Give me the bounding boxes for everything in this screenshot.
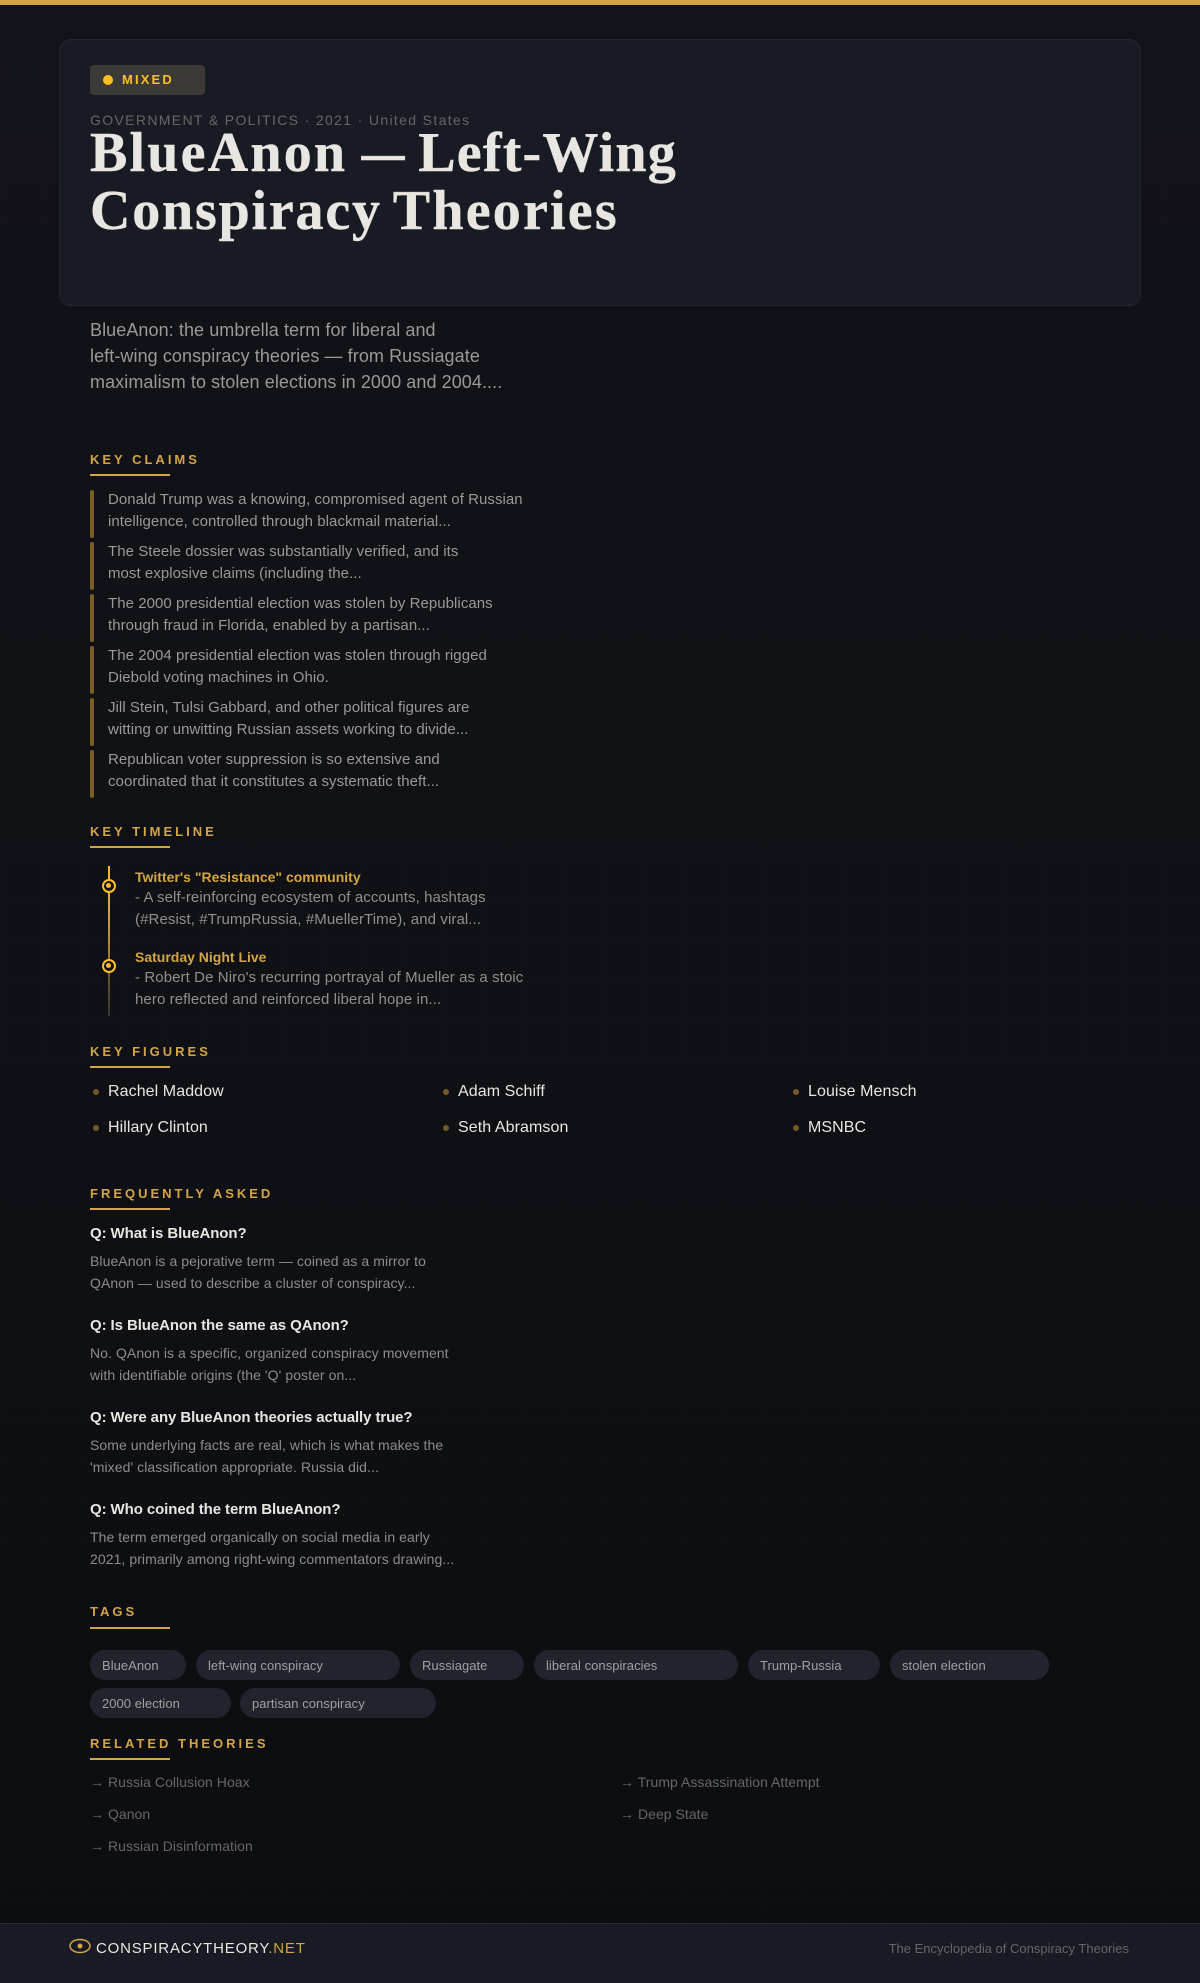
figure: Rachel Maddow: Rachel Maddow [108,1083,224,1100]
faq 3: Q: Were any BlueAnon theories actually true? [90,1409,413,1426]
claim 6: coordinated that it constitutes a systematic theft... [108,773,439,790]
intro text: left-wing conspiracy theories — from Russiagate [90,346,480,366]
heading: key timeline: KEY TIMELINE [90,824,217,839]
faq 2: with identifiable origins (the 'Q' poster on... [90,1367,356,1383]
tag: 2000 election [102,1696,180,1711]
timeline event 2: - Robert De Niro's recurring portrayal of Mueller as a stoic [135,969,523,986]
faq 4 [90,1501,454,1567]
heading: key claims: KEY CLAIMS [90,452,200,467]
panel: key timeline [90,824,523,1016]
heading: related theories: RELATED THEORIES [90,1736,268,1751]
tag [90,1650,186,1680]
timeline event 2: Saturday Night Live [135,949,266,965]
wordmark: CONSPIRACYTHEORY.NET [96,1940,306,1957]
claim 5: Jill Stein, Tulsi Gabbard, and other political figures are [108,699,469,716]
figure: Seth Abramson: Seth Abramson [458,1119,568,1136]
title [90,122,677,242]
title: — [361,122,404,184]
panel: key figures [90,1044,917,1136]
claim 1 [90,490,523,538]
timeline node 2 [102,959,116,973]
faq 4: The term emerged organically on social media in early [90,1529,430,1545]
tag: stolen election [902,1658,986,1673]
timeline node 1 [102,879,116,893]
tag [534,1650,738,1680]
intro text [90,320,502,392]
faq 1: Q: What is BlueAnon? [90,1225,247,1242]
timeline event 1: (#Resist, #TrumpRussia, #MuellerTime), and viral... [135,911,481,928]
related link: → Deep State [620,1806,708,1822]
claim 3: The 2000 presidential election was stolen by Republicans [108,595,493,612]
tag: left-wing conspiracy [208,1658,323,1673]
tag: liberal conspiracies [546,1658,657,1673]
icon: status dot [103,75,113,85]
claim 1: Donald Trump was a knowing, compromised agent of Russian [108,491,523,508]
heading: tags: TAGS [90,1604,137,1619]
faq 1: QAnon — used to describe a cluster of conspiracy... [90,1275,415,1291]
tag [748,1650,880,1680]
claim 4: The 2004 presidential election was stolen through rigged [108,647,487,664]
claim 1: intelligence, controlled through blackmail material... [108,513,451,530]
panel: key claims [90,452,523,798]
claim 3: through fraud in Florida, enabled by a partisan... [108,617,430,634]
heading: frequently asked: FREQUENTLY ASKED [90,1186,273,1201]
category and date line: GOVERNMENT & POLITICS · 2021 · United States [90,112,470,128]
tag [90,1688,231,1718]
claim 3 [90,594,493,642]
claim 6: Republican voter suppression is so extensive and [108,751,440,768]
heading: key figures: KEY FIGURES [90,1044,211,1059]
faq 3: 'mixed' classification appropriate. Russia did... [90,1459,379,1475]
claim 4: Diebold voting machines in Ohio. [108,669,329,686]
panel: tags [90,1604,1049,1718]
tag: BlueAnon [102,1658,159,1673]
related link: → Russia Collusion Hoax [90,1774,250,1790]
tag [240,1688,436,1718]
faq 1 [90,1225,426,1291]
related link: → Qanon [90,1806,150,1822]
faq 4: 2021, primarily among right-wing commentators drawing... [90,1551,454,1567]
panel: frequently asked [90,1186,454,1567]
timeline line [108,866,110,1016]
faq 1: BlueAnon is a pejorative term — coined as a mirror to [90,1253,426,1269]
title: BlueAnon Left-Wing [90,122,677,184]
timeline event 2: hero reflected and reinforced liberal hope in... [135,991,441,1008]
tag [410,1650,524,1680]
faq 4: Q: Who coined the term BlueAnon? [90,1501,340,1518]
faq 3 [90,1409,443,1475]
related link: → Trump Assassination Attempt [620,1774,820,1790]
timeline event 2 [135,949,523,1008]
tagline: The Encyclopedia of Conspiracy Theories [889,1941,1129,1956]
figure: Adam Schiff: Adam Schiff [458,1083,545,1100]
top accent bar [0,0,1200,5]
intro text: BlueAnon: the umbrella term for liberal and [90,320,436,340]
claim 4 [90,646,487,694]
claim 6 [90,750,440,798]
timeline event 1: - A self-reinforcing ecosystem of accounts, hashtags [135,889,486,906]
tag [890,1650,1049,1680]
faq 2 [90,1317,449,1383]
tag: Trump-Russia [760,1658,842,1673]
figure: Hillary Clinton: Hillary Clinton [108,1119,208,1136]
footer [0,1923,1200,1983]
timeline event 1: Twitter's "Resistance" community [135,869,361,885]
icon: eye logo [69,1938,91,1954]
timeline event 1 [135,869,486,928]
claim 5 [90,698,469,746]
title: Conspiracy Theories [90,180,619,242]
claim 2: most explosive claims (including the... [108,565,362,582]
badge: mixed verdict [90,65,205,95]
intro text: maximalism to stolen elections in 2000 and 2004.... [90,372,502,392]
badge label: MIXED [122,72,174,87]
panel: related theories [90,1736,820,1854]
panel: hero header [59,39,1141,306]
tag: partisan conspiracy [252,1696,365,1711]
figure: Louise Mensch: Louise Mensch [808,1083,917,1100]
faq 2: Q: Is BlueAnon the same as QAnon? [90,1317,349,1334]
figure: MSNBC: MSNBC [808,1119,866,1136]
faq 3: Some underlying facts are real, which is what makes the [90,1437,443,1453]
related link: → Russian Disinformation [90,1838,253,1854]
tag: Russiagate [422,1658,487,1673]
claim 2: The Steele dossier was substantially verified, and its [108,543,458,560]
faq 2: No. QAnon is a specific, organized conspiracy movement [90,1345,449,1361]
tag [196,1650,400,1680]
claim 2 [90,542,458,590]
claim 5: witting or unwitting Russian assets working to divide... [108,721,468,738]
